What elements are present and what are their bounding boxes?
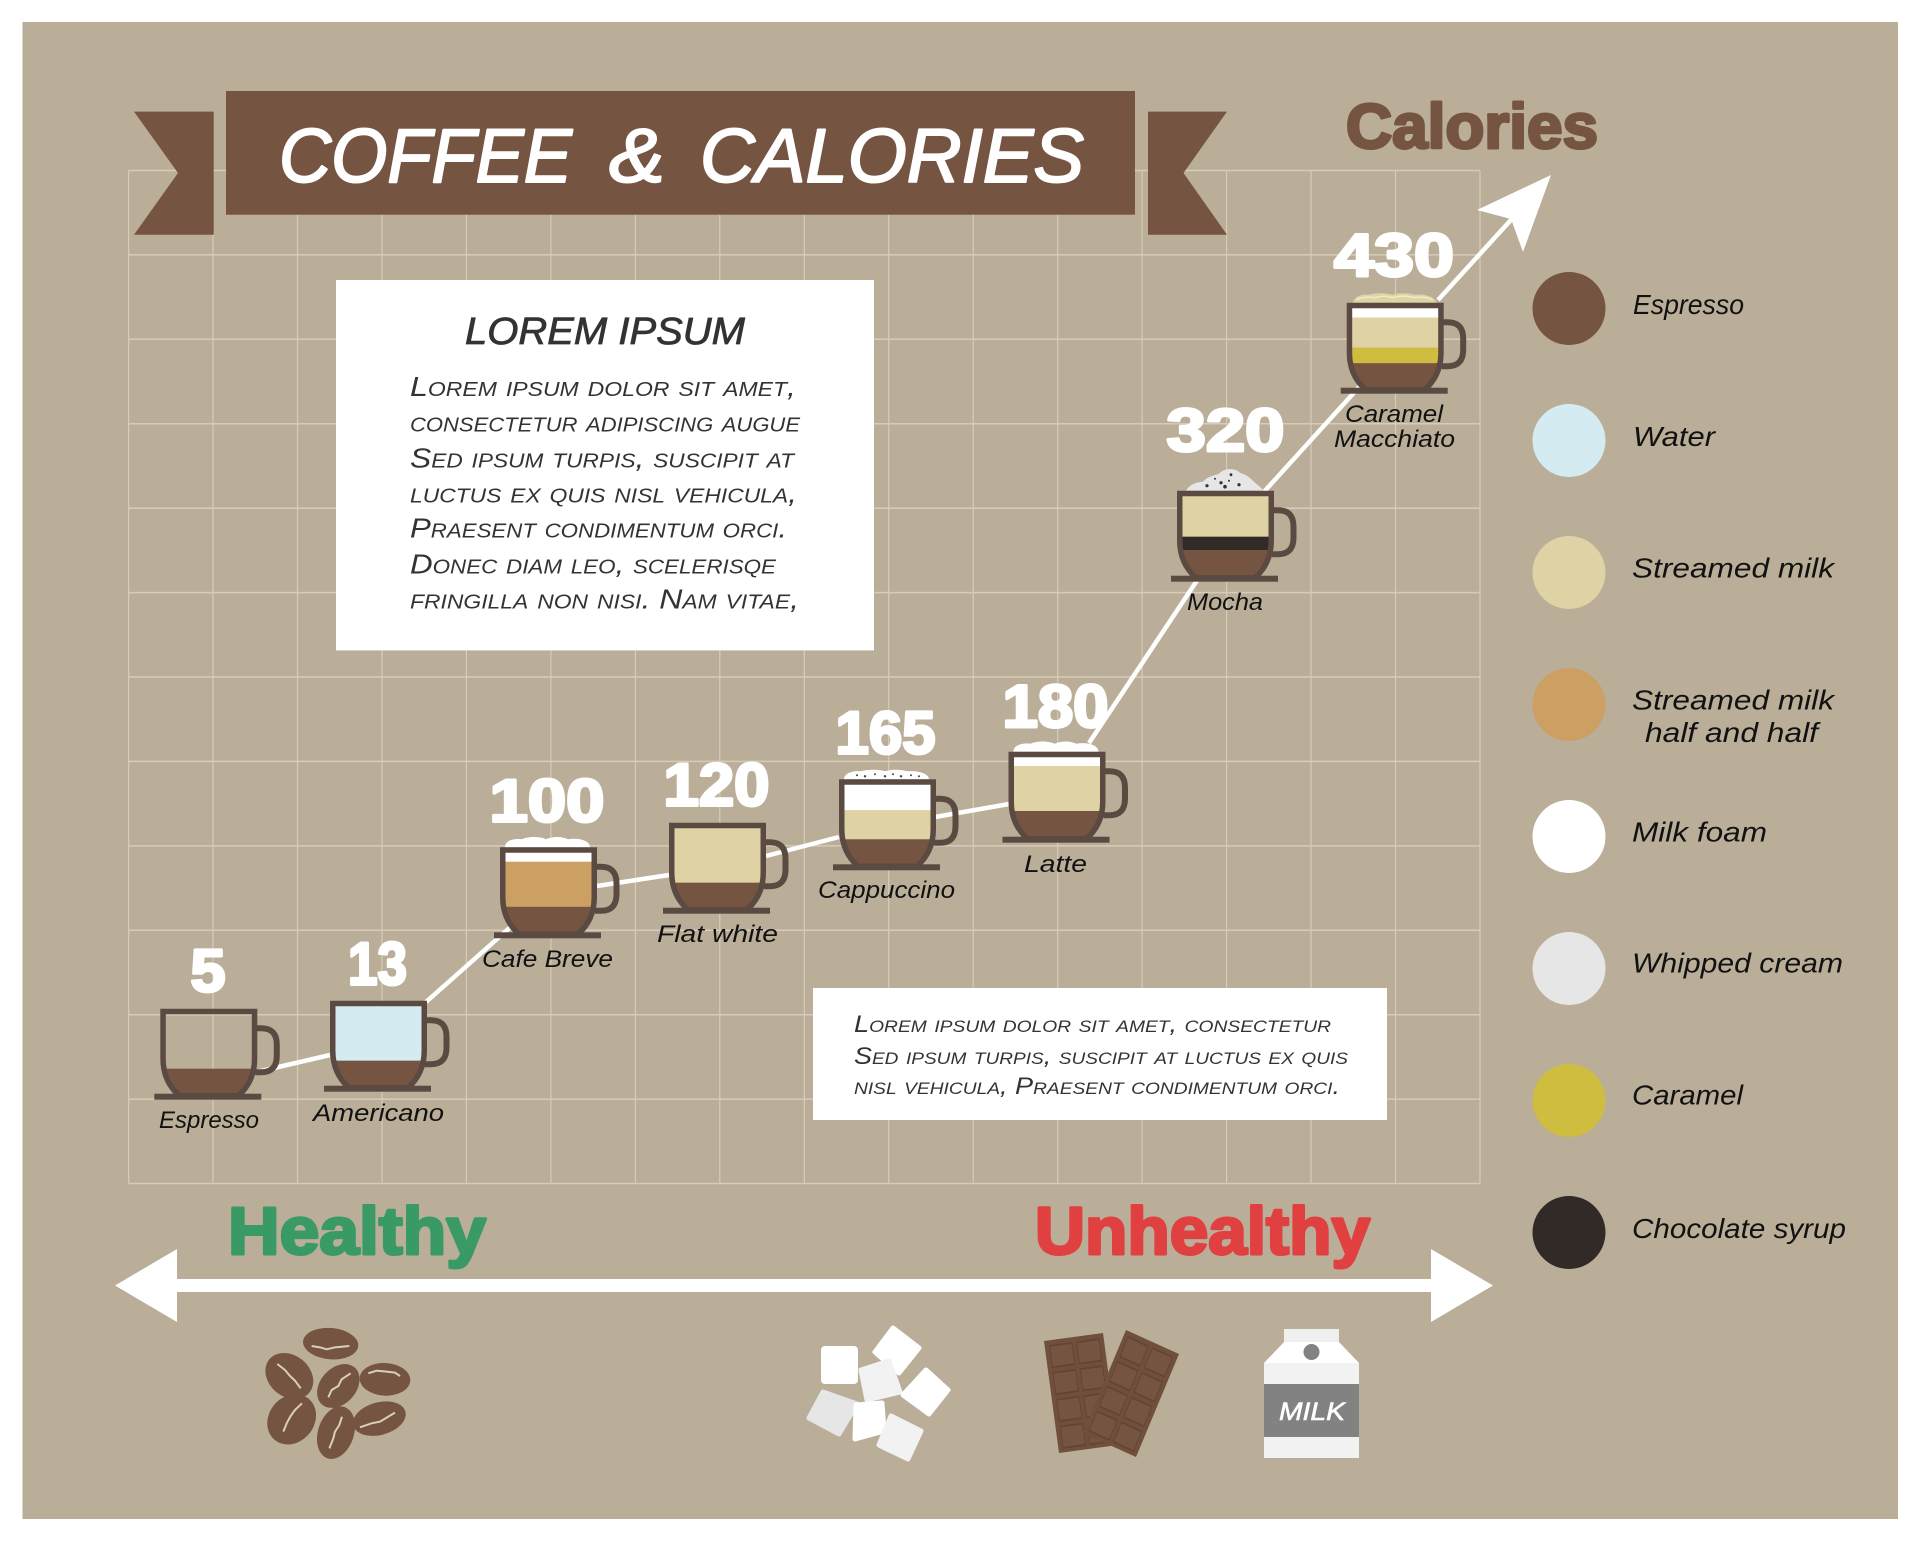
- card body: consectetur adipiscing augue: [410, 406, 801, 438]
- legend: Milk foam: Milk foam: [1632, 816, 1767, 848]
- cup: Espresso: [154, 1011, 277, 1100]
- legend: Streamed milk: Streamed milk: [1632, 552, 1836, 584]
- double-headed health arrow: [115, 1249, 1493, 1322]
- title: &: [609, 114, 665, 199]
- left bar: [1044, 1333, 1118, 1453]
- legend: Whipped cream: Whipped cream: [1632, 948, 1843, 978]
- legend: Chocolate syrup: [1532, 1196, 1846, 1269]
- text card: short note: Sed ipsum turpis, suscipit at luctus ex quis: [854, 1043, 1349, 1070]
- label: Cafe Breve: Cafe Breve: [482, 946, 613, 973]
- right bar: [1083, 1330, 1179, 1457]
- label: Espresso: Espresso: [159, 1107, 259, 1134]
- cup: Mocha: [1171, 469, 1294, 582]
- legend: Caramel: [1532, 1064, 1744, 1137]
- title: COFFEE: [279, 114, 573, 199]
- label: Caramel Macchiato: [1334, 401, 1455, 453]
- legend: Milk foam: [1532, 800, 1767, 873]
- card body: Sed ipsum turpis, suscipit at: [410, 442, 796, 474]
- left ribbon: [134, 112, 214, 235]
- legend: Espresso: [1532, 272, 1744, 345]
- axis heading: Calories: Calories: [1346, 92, 1598, 162]
- icon: milk carton: [1264, 1329, 1359, 1458]
- value: 100: 100: [490, 768, 604, 834]
- title: [279, 114, 1084, 199]
- legend: Streamed milk: [1532, 536, 1836, 609]
- card body: Lorem ipsum dolor sit amet,: [410, 371, 796, 402]
- icon: coffee beans: [256, 1326, 411, 1464]
- heading: Healthy: Healthy: [228, 1194, 486, 1269]
- value: 13: 13: [348, 930, 407, 998]
- legend: Streamed milk half and half: [1532, 668, 1836, 748]
- legend: Caramel: Caramel: [1632, 1080, 1744, 1110]
- cup: Cafe Breve: [494, 837, 616, 938]
- text card: Lorem ipsum: [336, 280, 874, 650]
- value: 120: 120: [664, 752, 770, 818]
- calorie trend line: [257, 199, 1530, 1072]
- title: CALORIES: [700, 114, 1084, 199]
- text card: short note: [813, 988, 1387, 1120]
- icon: sugar cubes: [809, 1328, 948, 1459]
- legend: Water: [1532, 404, 1717, 477]
- title banner: [134, 91, 1227, 235]
- legend: [1532, 272, 1846, 1269]
- card body: [410, 371, 801, 614]
- label: Latte: Latte: [1024, 851, 1087, 878]
- label: Americano: Americano: [311, 1100, 444, 1127]
- banner bar: [226, 91, 1135, 215]
- value: 430: 430: [1334, 222, 1454, 289]
- label: Caramel Macchiato: Macchiato: [1334, 426, 1455, 453]
- card heading: LOREM IPSUM: [465, 311, 745, 353]
- text card: short note: nisl vehicula, Praesent condimentum orci.: [854, 1073, 1340, 1100]
- legend: Chocolate syrup: Chocolate syrup: [1632, 1213, 1846, 1244]
- label: Caramel Macchiato: Caramel: [1345, 401, 1444, 428]
- legend: Whipped cream: [1532, 932, 1843, 1005]
- label: Mocha: Mocha: [1187, 589, 1263, 616]
- icon: chocolate bars: [1044, 1330, 1179, 1457]
- value: 320: 320: [1166, 397, 1284, 464]
- value: 165: 165: [836, 700, 936, 766]
- cup: Caramel Macchiato: [1341, 293, 1463, 394]
- heading: Unhealthy: Unhealthy: [1035, 1194, 1370, 1269]
- card body: Praesent condimentum orci.: [410, 512, 787, 544]
- carton label: MILK: [1279, 1398, 1346, 1426]
- trend arrowhead: [1477, 175, 1551, 252]
- cup: Latte: [1002, 741, 1125, 843]
- card body: fringilla non nisi. Nam vitae,: [410, 584, 799, 614]
- value: 180: 180: [1002, 673, 1108, 740]
- value: 5: 5: [190, 938, 226, 1004]
- legend: Water: Water: [1633, 421, 1717, 452]
- legend: Streamed milk half and half: half and half: [1645, 717, 1822, 748]
- cup: Americano: [324, 1001, 446, 1092]
- card body: luctus ex quis nisl vehicula,: [410, 478, 797, 508]
- cup: Flat white: [663, 823, 786, 914]
- text card: short note: Lorem ipsum dolor sit amet, consectetur: [854, 1011, 1331, 1038]
- cup: Cappuccino: [833, 770, 956, 870]
- legend: Streamed milk half and half: Streamed milk: [1632, 684, 1836, 716]
- card body: Donec diam leo, scelerisqe: [410, 548, 777, 580]
- right ribbon: [1148, 112, 1227, 235]
- label: Flat white: Flat white: [657, 921, 778, 948]
- label: Cappuccino: Cappuccino: [818, 877, 955, 904]
- legend: Espresso: Espresso: [1633, 289, 1744, 320]
- grid: [129, 170, 1480, 1184]
